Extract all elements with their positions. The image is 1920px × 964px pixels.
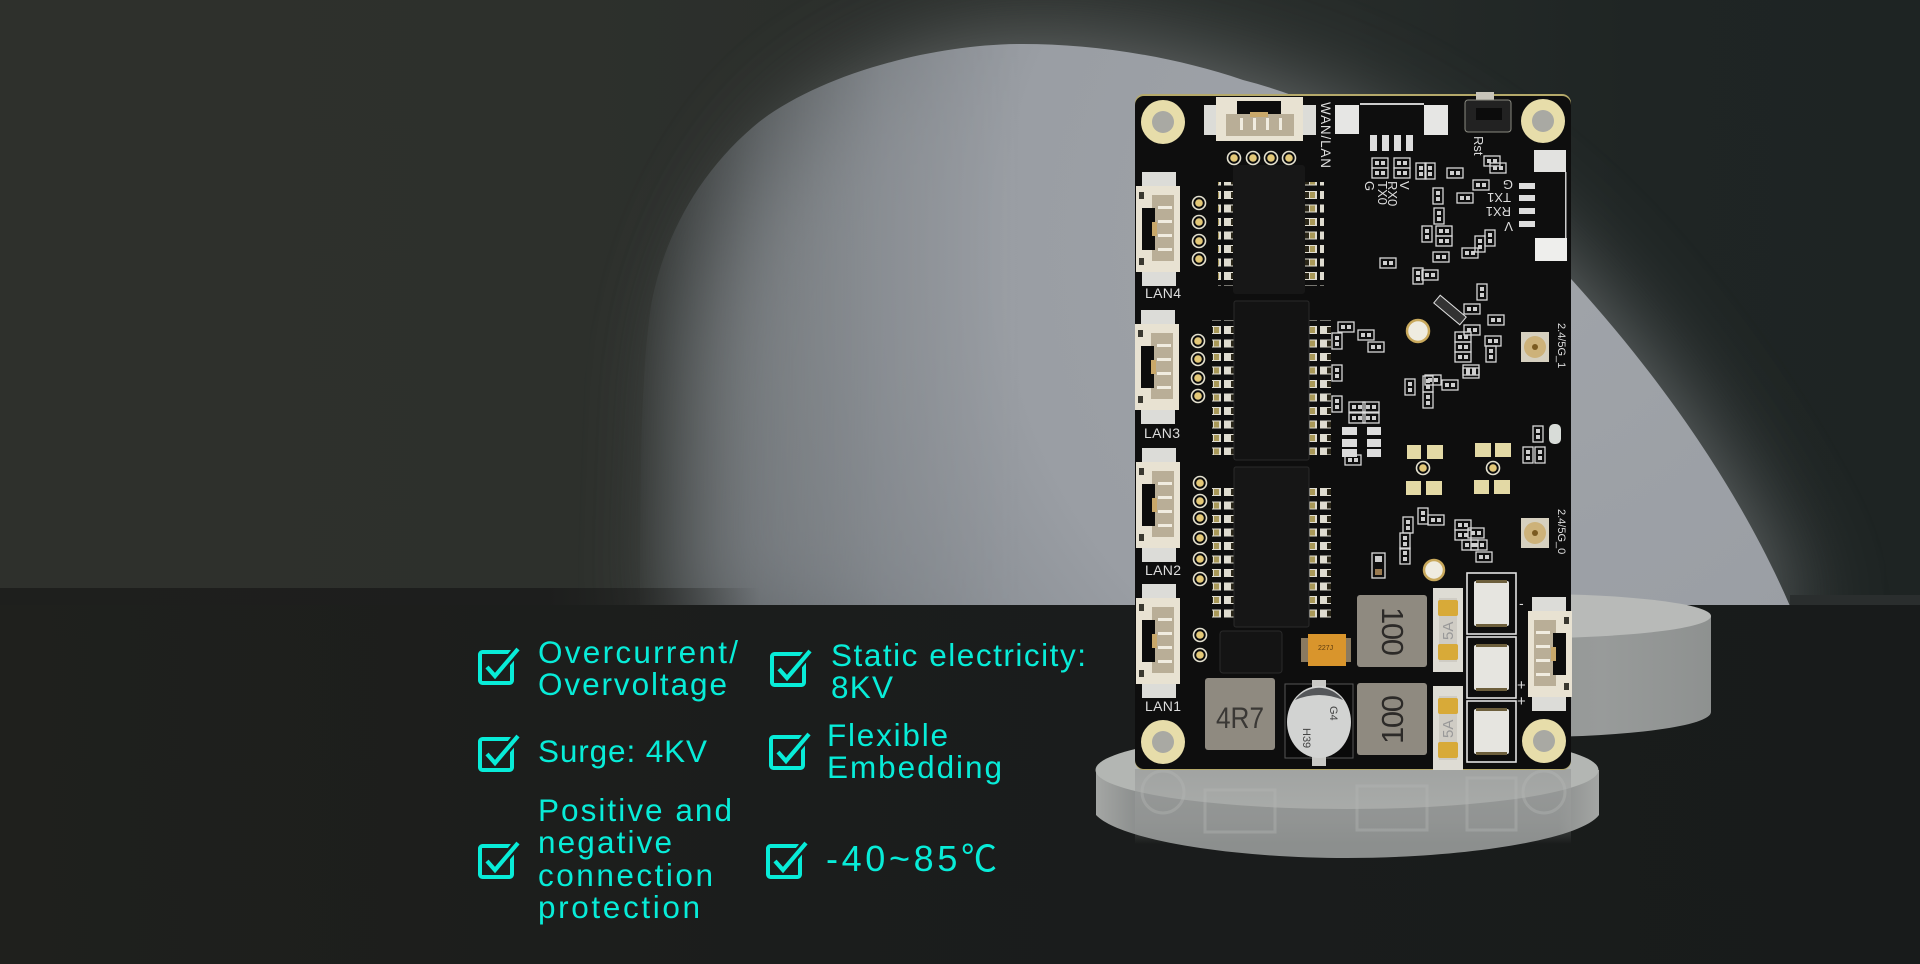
- feature: reverse polarity protection: Positive and: [538, 792, 732, 828]
- feature: static electricity: Static electricity:: [831, 637, 1086, 673]
- electrolytic capacitor: [1285, 680, 1353, 766]
- antenna connectors: [1521, 332, 1549, 548]
- silkscreen labels: G: [1362, 181, 1377, 191]
- silkscreen labels: RX1: [1486, 204, 1511, 219]
- silkscreen labels: Rst: [1471, 136, 1486, 156]
- feature: surge: Surge: 4KV: [538, 733, 707, 769]
- power inductors: 100: [1375, 607, 1410, 656]
- silkscreen labels: TX1: [1487, 190, 1511, 205]
- silkscreen labels: TX0: [1375, 181, 1390, 205]
- top white pads and reset button: [1335, 92, 1567, 261]
- electrolytic capacitor: G4: [1327, 706, 1339, 721]
- dome glow: [685, 44, 1790, 640]
- top connector: [1204, 97, 1316, 141]
- silkscreen labels: G: [1503, 177, 1513, 192]
- silkscreen labels: [1144, 102, 1567, 714]
- fuses: 5A: [1440, 720, 1457, 738]
- feature: flexible embedding: Embedding: [827, 749, 1002, 785]
- rear podium: [1349, 594, 1711, 737]
- dome shape behind the board: [640, 44, 1790, 606]
- feature: overcurrent: [480, 634, 738, 702]
- feature: flexible embedding: [771, 717, 1002, 785]
- silkscreen labels: RX0: [1385, 181, 1400, 206]
- feature: static electricity: 8KV: [831, 669, 893, 705]
- feature: reverse polarity protection: [480, 792, 732, 925]
- circuit board: [1135, 92, 1572, 770]
- silkscreen labels: +: [1517, 677, 1526, 694]
- electrolytic capacitor: H39: [1300, 728, 1312, 748]
- tantalum capacitor: [1301, 634, 1351, 666]
- floor: [0, 588, 1920, 964]
- silkscreen labels: +: [1517, 693, 1526, 710]
- mounting holes: [1141, 99, 1566, 764]
- LAN connectors: [1135, 172, 1572, 711]
- power inductors: 100: [1375, 695, 1410, 744]
- feature: static electricity: [772, 637, 1086, 705]
- power inductors: 4R7: [1216, 702, 1264, 735]
- feature: flexible embedding: Flexible: [827, 717, 948, 753]
- board substrate: [1135, 94, 1571, 770]
- silkscreen labels: V: [1397, 181, 1412, 190]
- silkscreen labels: 2.4/5G_0: [1555, 509, 1567, 554]
- feature: reverse polarity protection: protection: [538, 889, 700, 925]
- feature: reverse polarity protection: connection: [538, 857, 713, 893]
- feature: overcurrent: Overvoltage: [538, 666, 727, 702]
- small SMD components: [1332, 156, 1561, 578]
- silkscreen labels: 2.4/5G_1: [1555, 323, 1567, 368]
- black diode: [1220, 631, 1282, 673]
- silkscreen labels: -: [1519, 595, 1524, 611]
- transformer chips: [1212, 165, 1331, 627]
- feature: temperature range: -40~85℃: [826, 838, 997, 879]
- feature: overcurrent: Overcurrent/: [538, 634, 738, 670]
- tantalum capacitor: 227J: [1318, 645, 1333, 652]
- plated through holes: [1407, 320, 1444, 580]
- silkscreen labels: WAN/LAN: [1318, 102, 1333, 168]
- front podium with board reflection: [1096, 731, 1599, 858]
- silkscreen labels: LAN1: [1145, 698, 1181, 714]
- silkscreen labels: LAN2: [1145, 562, 1181, 578]
- fuses: [1433, 588, 1463, 770]
- feature checklist: [480, 634, 1086, 925]
- power inductors: [1205, 595, 1427, 755]
- silkscreen labels: LAN4: [1145, 285, 1181, 301]
- feature: reverse polarity protection: negative: [538, 824, 672, 860]
- via rows: [1192, 152, 1500, 662]
- silkscreen labels: V: [1504, 219, 1513, 234]
- fuses: 5A: [1440, 622, 1457, 640]
- silkscreen labels: LAN3: [1144, 425, 1180, 441]
- TVS diodes: [1467, 573, 1516, 762]
